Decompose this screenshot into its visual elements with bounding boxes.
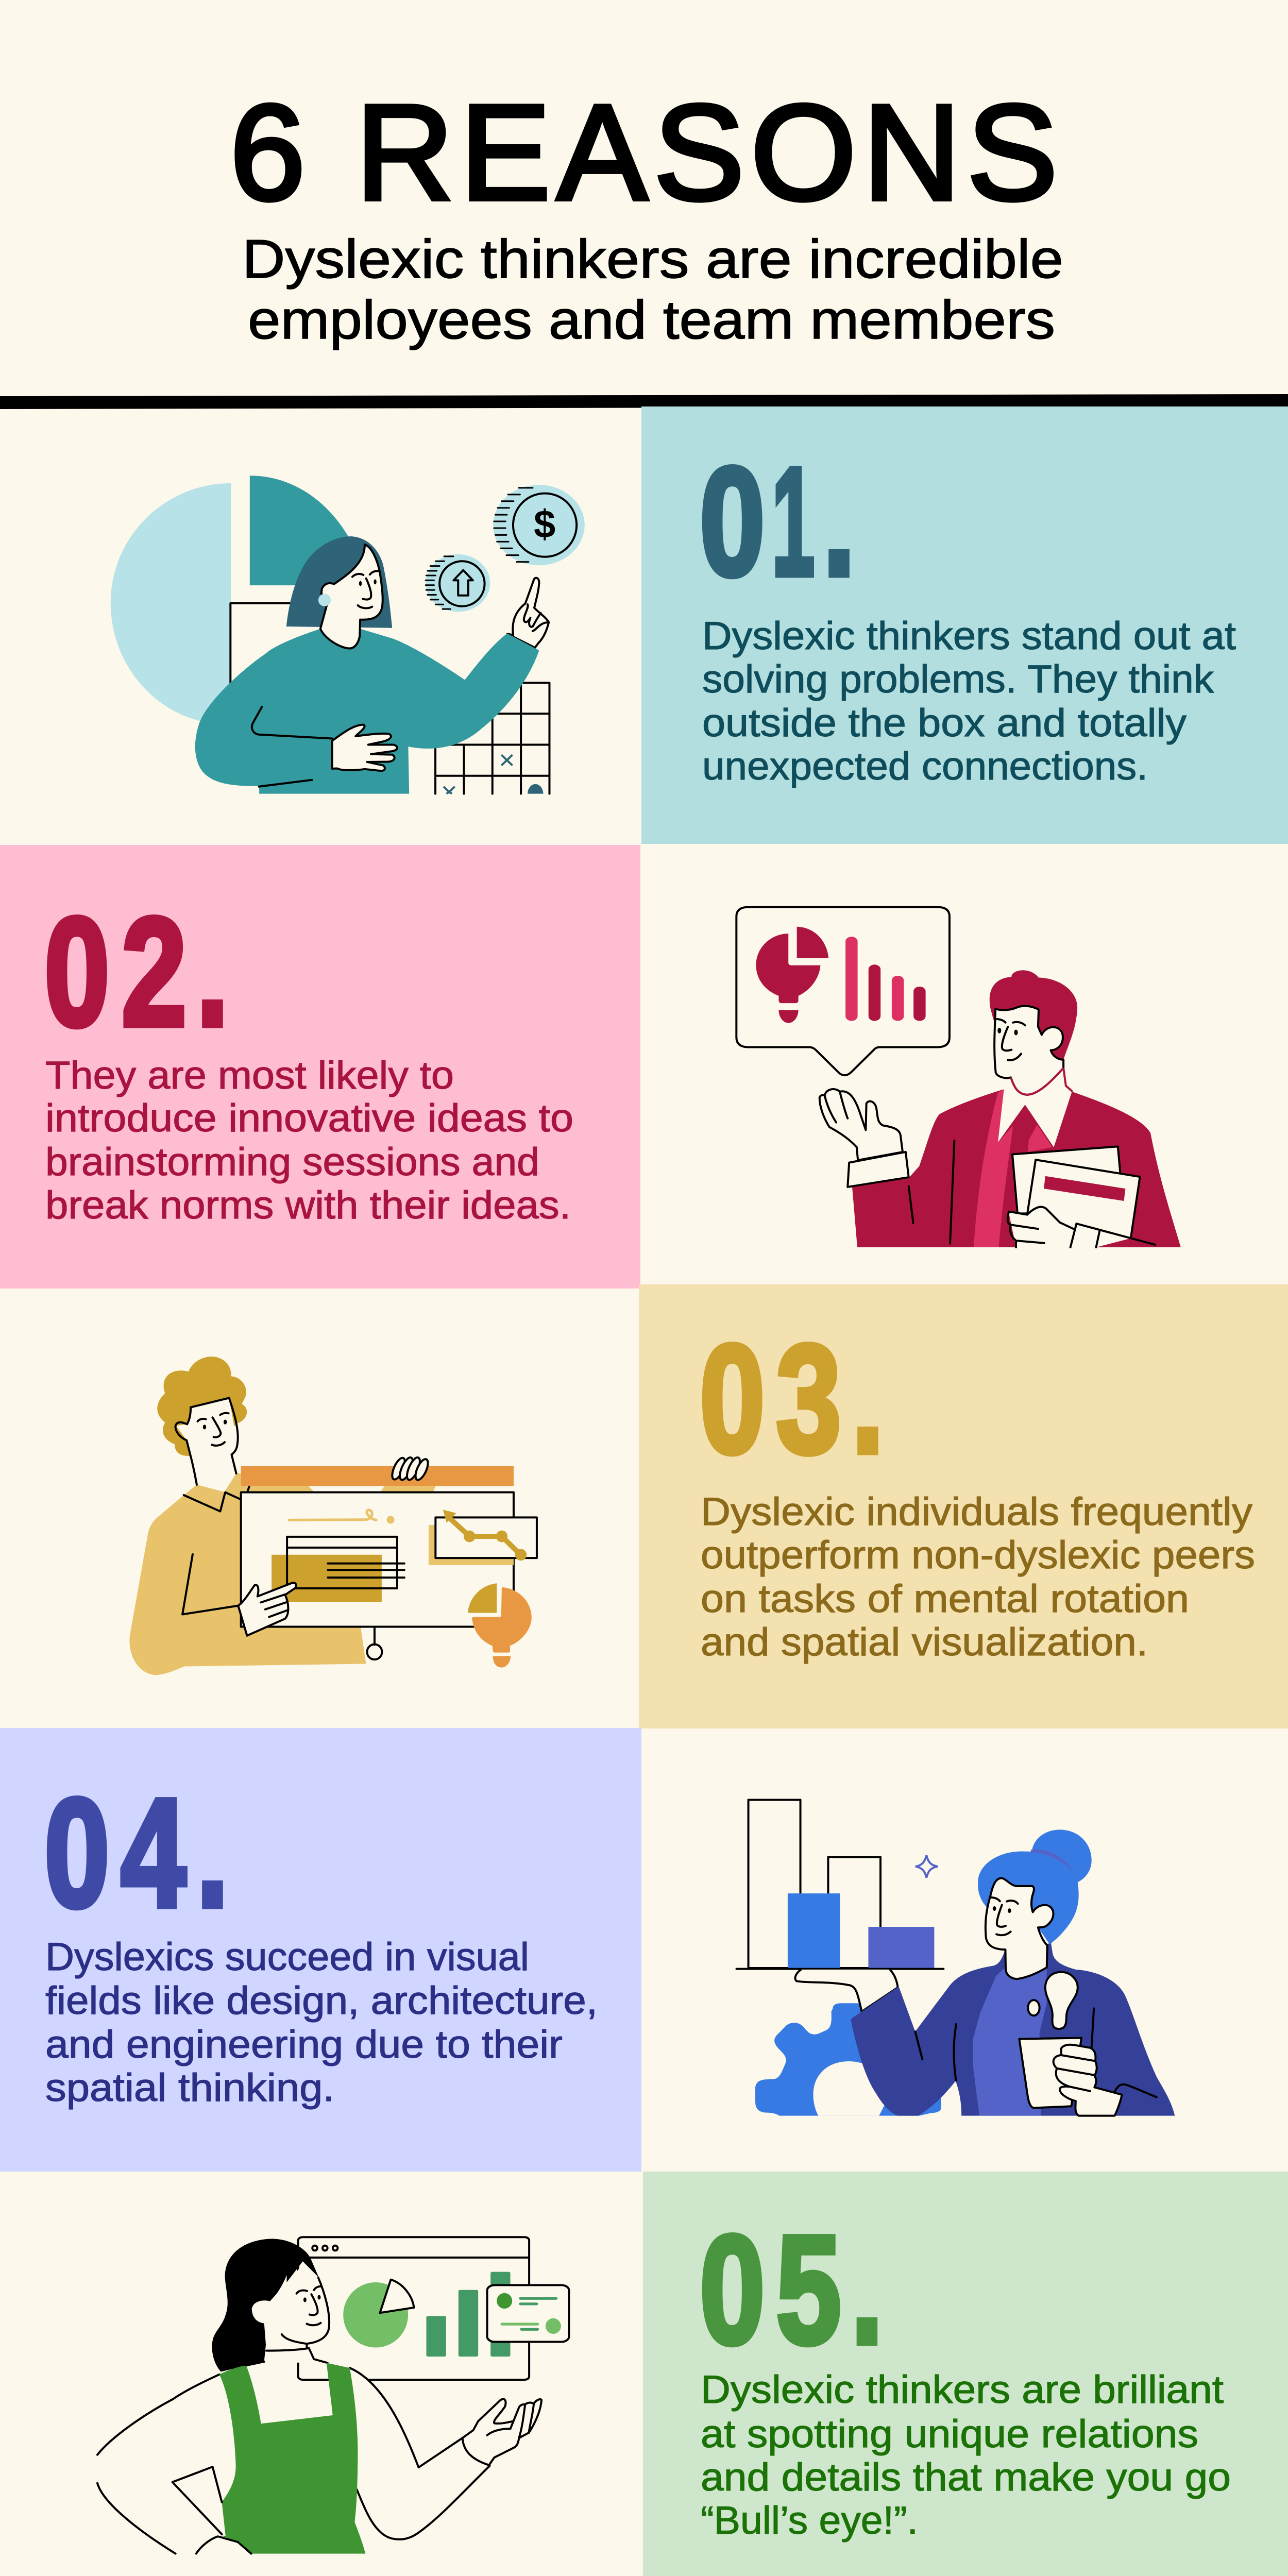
orange bar [241,1466,514,1486]
title: 6 REASONS [230,76,1058,228]
lightbulb pendant [1028,1972,1078,2029]
text 01 [702,614,1236,788]
number 05: 05. [700,2204,884,2376]
text 01: solving problems. They think [702,657,1214,701]
arm and hand on belly [252,707,397,787]
text 03 [701,1490,1255,1664]
illustration: woman with dashboard window [97,2237,569,2554]
number 03: 03. [700,1313,884,1485]
panel background 04 [0,1728,641,2172]
pointing hand [238,1583,296,1636]
text 02 [45,1054,573,1227]
blue hair [978,1829,1092,1944]
man's face and collar [994,1006,1073,1147]
text 04: Dyslexics succeed in visual [45,1935,529,1979]
presentation board [241,1493,514,1659]
man's hair [990,970,1077,1060]
dashboard window [298,2237,529,2380]
face [986,1878,1053,1979]
number 01 [700,435,855,608]
raised hand and cuff [820,1089,909,1187]
text 04: fields like design, architecture, [45,1979,598,2023]
text 05: at spotting unique relations [701,2412,1198,2456]
illustration: man with speech bubble [736,907,1181,1247]
panel background 02 [0,845,640,1289]
jacket [852,1089,1181,1247]
hair [286,536,392,628]
illustration: woman pointing at coins [111,476,585,794]
grid [435,683,549,794]
bars [426,2272,511,2357]
panel: reason 01 [641,406,1288,844]
text 02: brainstorming sessions and [45,1140,539,1184]
header [230,76,1063,350]
panel: reason 02 [0,845,640,1289]
info card [487,2285,569,2342]
line chart card [429,1510,537,1565]
hand pointing [507,578,549,648]
pie chart [111,476,349,723]
arm and body outline [97,2368,489,2554]
jacket [851,1943,1175,2116]
text 05: Dyslexic thinkers are brilliant [701,2368,1224,2412]
icon: dollar coin [493,485,585,565]
text 03: Dyslexic individuals frequently [701,1490,1252,1534]
shirt [129,1473,435,1675]
illustration: woman with bar chart and gear [737,1800,1175,2116]
fingers on bar [389,1456,430,1481]
sparkle [916,1855,938,1878]
face [318,545,383,649]
text 01: Dyslexic thinkers stand out at [702,614,1236,658]
cup and hand [1019,2038,1122,2116]
icon: dollar coin: $ [534,503,555,547]
panel: reason 03 [639,1284,1288,1728]
face [252,2261,329,2365]
text 05: and details that make you go [701,2455,1231,2499]
documents [1008,1146,1155,1247]
subtitle [242,229,1063,350]
number 01: 0 [700,436,765,608]
arm holding tray [795,1970,898,2012]
panel background 01 [641,406,1288,844]
panel background 03 [639,1284,1288,1728]
number 01: 1 [772,435,815,608]
panel: reason 04 [0,1728,641,2172]
text 04 [45,1935,598,2110]
text 01: outside the box and totally [702,701,1187,745]
text 03: on tasks of mental rotation [701,1577,1189,1621]
text 04: and engineering due to their [45,2023,563,2066]
curly hair [157,1357,247,1458]
illustration: man presenting on a board [129,1357,537,1675]
text 01: unexpected connections. [702,744,1148,788]
number 02: 02. [44,886,229,1058]
number 04: 04. [44,1767,229,1939]
speech bubble with chart [736,907,950,1075]
text 03: and spatial visualization. [701,1620,1148,1664]
pie chart [343,2280,414,2348]
black hair [212,2239,319,2371]
top divider bar [0,394,1288,409]
text 03: outperform non-dyslexic peers [701,1533,1255,1577]
face [176,1398,238,1492]
teal sweater [195,629,539,794]
gear [755,2003,941,2116]
number 01: . [823,436,855,608]
subtitle: employees and team members [248,290,1055,350]
subtitle: Dyslexic thinkers are incredible [242,229,1063,290]
pie lightbulb [468,1583,532,1668]
text 05 [701,2368,1231,2543]
text 02: break norms with their ideas. [45,1183,571,1227]
panel background 05 [643,2172,1288,2576]
text 02: introduce innovative ideas to [45,1096,573,1140]
icon: up arrow coin [426,554,490,612]
green apron [219,2363,365,2554]
text 05: “Bull’s eye!”. [701,2499,918,2543]
text 04: spatial thinking. [45,2066,334,2110]
hands [173,2362,541,2554]
text 02: They are most likely to [45,1054,454,1097]
bar chart on tray [737,1800,943,1969]
panel: reason 05 [643,2172,1288,2576]
